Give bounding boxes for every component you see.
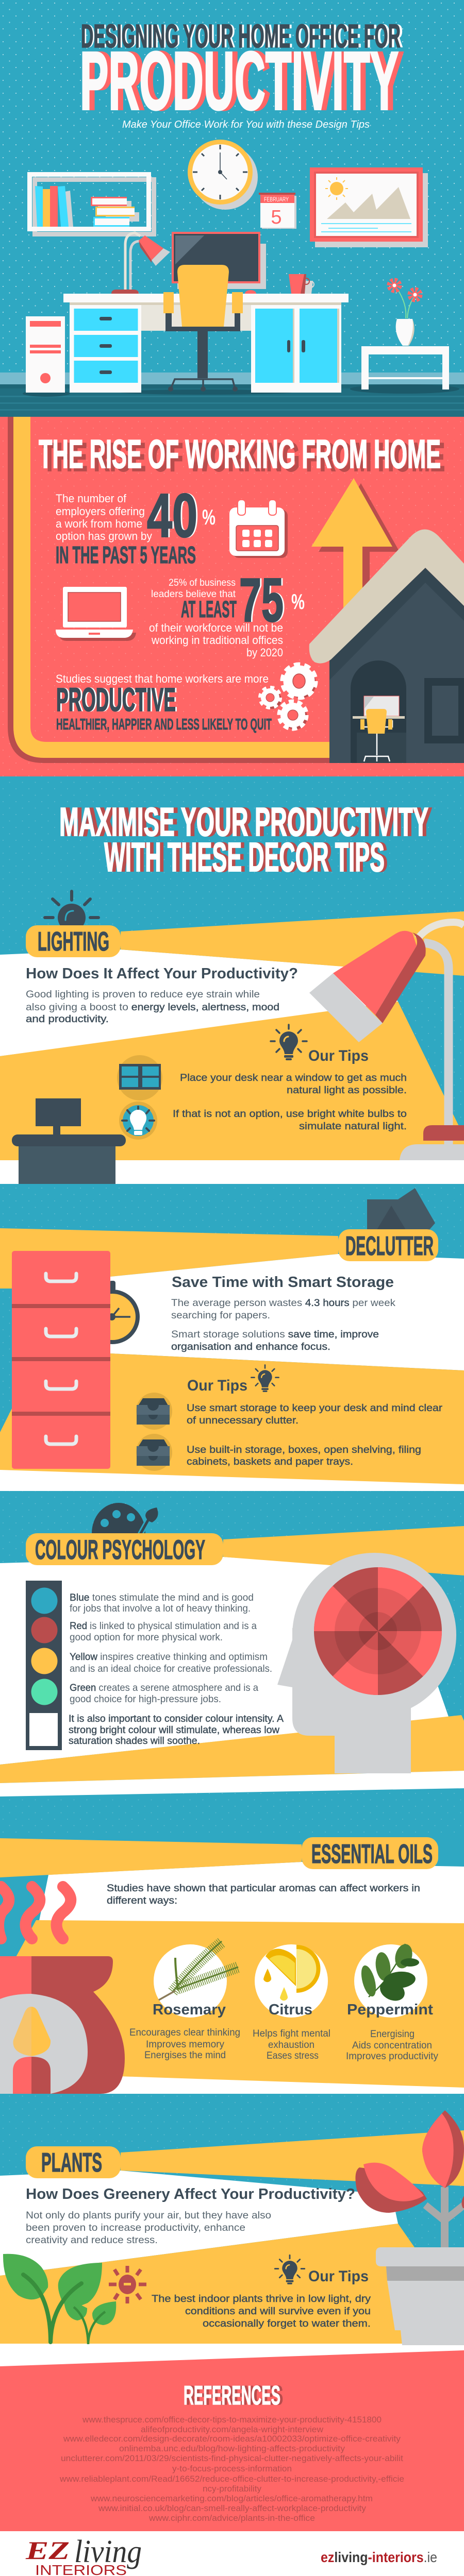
icon: gears (260, 665, 316, 730)
stat: 40 percent: option has grown by (56, 530, 152, 543)
label: plants (26, 2146, 121, 2178)
tip: bulbs (173, 1108, 407, 1132)
text: declutter intro (171, 1297, 395, 1352)
card: citrus (253, 1944, 330, 2061)
name: Peppermint (347, 2002, 433, 2018)
benefits: Aids concentration (352, 2040, 432, 2051)
subtitle: Make Your Office Work for You with these Design Tips (122, 119, 370, 130)
cabinet doors (251, 305, 341, 393)
label: lighting: LIGHTING (38, 927, 109, 957)
icon: paper tray (136, 1434, 172, 1471)
icon: white bulb (119, 1101, 157, 1140)
wall and floor (0, 372, 464, 417)
bands (0, 1526, 464, 1797)
tip: smart storage: of unnecessary clutter. (187, 1415, 299, 1426)
stat: 75 percent: AT LEAST (181, 596, 237, 622)
stat: 40 percent: 40 (148, 481, 199, 550)
benefits: exhaustion (268, 2040, 314, 2050)
panel: references (0, 2350, 464, 2531)
icon: paper tray (136, 1393, 172, 1430)
text: plants intro: been proven to increase productivity, enhance (26, 2222, 245, 2233)
text: plants intro: Not only do plants purify your air, but they have also (26, 2210, 271, 2221)
benefits: Improves memory (146, 2039, 224, 2050)
panel: maximise heading (0, 776, 464, 1493)
panel: footer (0, 2531, 464, 2576)
reference list: unclutterer.com/2011/03/29/scientists-find-physical-clutter-negatively-affects-your-abilit (61, 2453, 403, 2463)
reference list: www.neurosciencemarketing.com/blog/articles/office-aromatherapy.htm (90, 2494, 373, 2503)
reference list: www.reliableplant.com/Read/16652/reduce-office-clutter-to-increase-productivity,-efficie (59, 2474, 404, 2484)
bands (0, 1228, 464, 1491)
reference list: www.initial.co.uk/blog/can-smell-really-affect-workplace-productivity (98, 2503, 367, 2513)
icon: citrus (263, 1945, 321, 2001)
label: declutter (338, 1229, 438, 1261)
text: colour descriptions: It is also important to consider colour intensity. A (69, 1714, 284, 1724)
tip: window: natural light as possible. (287, 1084, 407, 1096)
text: aromas intro (107, 1883, 420, 1906)
icon: large desk lamp (309, 922, 464, 1160)
benefits (346, 2029, 438, 2062)
text: colour descriptions (69, 1592, 284, 1747)
text: declutter intro: organisation and enhance focus. (171, 1341, 330, 1352)
reference list: alifeofproductivity.com/angela-wright-interview (141, 2425, 324, 2434)
stat: 75 percent: 25% of business (169, 577, 236, 588)
bands (0, 1838, 464, 2094)
benefits (129, 2027, 240, 2061)
icon: bookshelf (30, 174, 154, 234)
tip: indoor plants: occasionally forget to water them. (203, 2318, 371, 2329)
stat: productive: PRODUCTIVE (58, 681, 177, 718)
icon: wall calendar: 5 (271, 207, 282, 228)
heading: greenery: How Does Greenery Affect Your Productivity? (26, 2186, 355, 2202)
icon: palette (92, 1503, 158, 1564)
icon: laptop (56, 587, 136, 641)
label: colour psychology (26, 1533, 223, 1565)
icon: small desk with monitor (12, 1098, 126, 1184)
stat: 40 percent: IN THE PAST 5 YEARS (56, 541, 196, 568)
tip: indoor plants (152, 2293, 371, 2329)
text: colour descriptions: saturation shades will soothe. (69, 1736, 200, 1747)
logo: EZ living interiors (25, 2534, 142, 2576)
stat: productive: Studies suggest that home workers are more (56, 672, 269, 685)
text: colour descriptions: Yellow inspires creative thinking and optimism (70, 1652, 268, 1663)
text: declutter intro: searching for papers. (171, 1310, 270, 1321)
tip: bulbs: simulate natural light. (299, 1121, 407, 1132)
icon: desk lamp (111, 233, 170, 294)
stat: 75 percent: 75 (239, 566, 284, 635)
icon: our tips bulb (251, 1365, 279, 1392)
stat: 40 percent: The number of (56, 492, 127, 505)
tip: built-in storage: Use built-in storage, boxes, open shelving, filing (187, 1444, 421, 1455)
small desk and chair (353, 696, 405, 761)
benefits: Encourages clear thinking (129, 2027, 240, 2038)
panel: hero (0, 0, 464, 417)
icon: lighting bulb (45, 891, 98, 931)
stat: productive (56, 672, 272, 733)
card: rosemary (129, 1941, 240, 2061)
logo: EZ living interiors: living (74, 2534, 142, 2569)
heading: our tips: Our Tips (308, 1047, 369, 1064)
tip: window (180, 1072, 407, 1096)
icon: office chair (163, 265, 243, 392)
icon: calendar (229, 500, 288, 558)
icon: wall calendar: FEBRUARY (264, 197, 289, 203)
reference list: www.ciphr.com/advice/plants-in-the-office (148, 2513, 315, 2523)
icon: peppermint (358, 1942, 419, 2005)
heading: our tips: Our Tips (308, 2268, 369, 2285)
tip: built-in storage (187, 1444, 421, 1467)
website: ezliving-interiors.ie (321, 2549, 437, 2565)
tip: window: Place your desk near a window to get as much (180, 1072, 407, 1083)
text: aromas intro: different ways: (107, 1895, 177, 1906)
stat: 75 percent: leaders believe that (151, 588, 236, 600)
logo: EZ living interiors: EZ (25, 2536, 70, 2565)
text: declutter intro: Smart storage solutions save time, improve (171, 1329, 379, 1340)
panel: colour psychology (0, 1491, 464, 1836)
panel: plants (0, 2094, 464, 2375)
icon: potted plant (355, 2110, 464, 2345)
icon: head with colour wheel (277, 1553, 456, 1773)
reference list: y-to-focus-process-information (172, 2464, 292, 2473)
benefits: Eases stress (267, 2050, 319, 2061)
heading: REFERENCES (186, 2381, 283, 2411)
icon: wall calendar (259, 193, 296, 229)
label: lighting (26, 925, 121, 957)
text: colour descriptions: good choice for high-pressure jobs. (70, 1694, 221, 1705)
tip: indoor plants: conditions and will survive even if you (185, 2306, 371, 2317)
stat: 75 percent: of their workforce will not be (149, 621, 283, 634)
reference list (59, 2415, 404, 2523)
stat: 75 percent: working in traditional offices (151, 634, 283, 647)
text: colour descriptions: strong bright colour will stimulate, whereas low (69, 1725, 279, 1736)
text: colour descriptions: good option for more physical work. (70, 1632, 223, 1643)
icon: framed picture (310, 167, 428, 247)
stat: 75 percent: % (291, 589, 305, 614)
icon: our tips bulb (275, 2255, 305, 2284)
icon: rosemary (159, 1941, 238, 2000)
icon: desk (63, 290, 349, 393)
icon: window (117, 1055, 162, 1100)
icon: mugs (289, 274, 314, 294)
tip: built-in storage: cabinets, baskets and paper trays. (187, 1456, 353, 1467)
stat: 75 percent: 75 (241, 566, 285, 635)
text: declutter intro: The average person wastes 4.3 hours per week (171, 1297, 395, 1309)
card: peppermint (346, 1942, 438, 2062)
heading: REFERENCES (184, 2381, 280, 2411)
tip: smart storage: Use smart storage to keep your desk and mind clear (187, 1402, 443, 1414)
stat: productive: PRODUCTIVE (56, 681, 176, 718)
stat: 40 percent: a work from home (56, 517, 142, 530)
text: lighting intro: and productivity. (26, 1013, 109, 1025)
text: colour descriptions: for jobs that involve a lot of heavy thinking. (70, 1603, 251, 1614)
label: plants: PLANTS (41, 2148, 102, 2178)
icon: declutter box (367, 1188, 435, 1231)
text: lighting intro (26, 989, 279, 1025)
stat: 40 percent (56, 481, 216, 568)
stat: 40 percent: employers offering (56, 505, 145, 518)
text: colour descriptions: Blue tones stimulate the mind and is good (70, 1592, 254, 1603)
panel: lighting (0, 891, 464, 1184)
text: aromas intro: Studies have shown that particular aromas can affect workers in (107, 1883, 420, 1894)
name: Rosemary (153, 2002, 226, 2018)
icon: monitor (172, 232, 266, 289)
icon: computer tower (26, 316, 65, 393)
benefits: Energising (370, 2029, 415, 2040)
name: Citrus (269, 2002, 312, 2018)
benefits: Helps fight mental (253, 2028, 330, 2039)
icon: colour swatches (26, 1581, 62, 1750)
stat: 75 percent: by 2020 (246, 646, 283, 659)
icon: side table with flowers (361, 280, 449, 389)
stat: 75 percent (149, 566, 305, 659)
stat: 40 percent: % (202, 505, 216, 529)
benefits: Improves productivity (346, 2051, 438, 2062)
stat: productive: HEALTHIER, HAPPIER AND LESS LIKELY TO QUIT (56, 715, 272, 733)
panel: essential oils (0, 1837, 464, 2094)
icon: stopwatch (87, 1281, 138, 1342)
icon: wall clock (188, 140, 258, 210)
reference list: www.elledecor.com/design-decorate/room-ideas/a10002033/optimize-office-creativity (63, 2434, 401, 2444)
stat: 40 percent: 40 (147, 481, 197, 550)
tip: indoor plants: The best indoor plants thrive in low light, dry (152, 2293, 371, 2304)
label: colour psychology: COLOUR PSYCHOLOGY (35, 1535, 205, 1565)
light beam and bands (0, 911, 464, 1184)
text: plants intro (26, 2210, 271, 2246)
text: colour descriptions: and is an ideal choice for creative professionals. (70, 1664, 272, 1674)
decorative yellow path (8, 417, 330, 763)
text: lighting intro: also giving a boost to energy levels, alertness, mood (26, 1002, 279, 1013)
icon: sun (109, 2266, 146, 2303)
icon: steam (0, 1887, 71, 1939)
text: colour descriptions: Green creates a serene atmosphere and is a (70, 1683, 258, 1693)
reference list: onlinemba.unc.edu/blog/how-lighting-affects-productivity (119, 2444, 345, 2453)
heading: how does it affect: How Does It Affect Your Productivity? (26, 965, 298, 982)
icon: oil burner (0, 1956, 125, 2094)
text: lighting intro: Good lighting is proven to reduce eye strain while (26, 989, 260, 1000)
benefits (253, 2028, 330, 2061)
heading (184, 2381, 283, 2411)
tip: bulbs: If that is not an option, use bright white bulbs to (173, 1108, 407, 1120)
panel: declutter (0, 1188, 464, 1491)
icon: green leaves (3, 2254, 116, 2344)
panel: the rise of working from home (0, 417, 464, 776)
bands (0, 2130, 464, 2375)
drawers unit (70, 305, 141, 393)
benefits: Energises the mind (144, 2050, 226, 2061)
reference list: ncy-profitability (203, 2484, 261, 2494)
text: plants intro: creativity and reduce stress. (26, 2234, 158, 2246)
icon: house (309, 530, 464, 763)
heading: save time: Save Time with Smart Storage (172, 1274, 394, 1291)
arrow: rising (311, 478, 400, 629)
reference list: www.thespruce.com/office-decor-tips-to-maximize-your-productivity-4151800 (82, 2415, 382, 2425)
icon: our tips bulb (271, 1025, 307, 1060)
heading: our tips: Our Tips (187, 1377, 247, 1394)
icon: filing cabinet (12, 1251, 110, 1469)
tip: smart storage (187, 1402, 443, 1426)
text: colour descriptions: Red is linked to physical stimulation and is a (70, 1621, 257, 1632)
